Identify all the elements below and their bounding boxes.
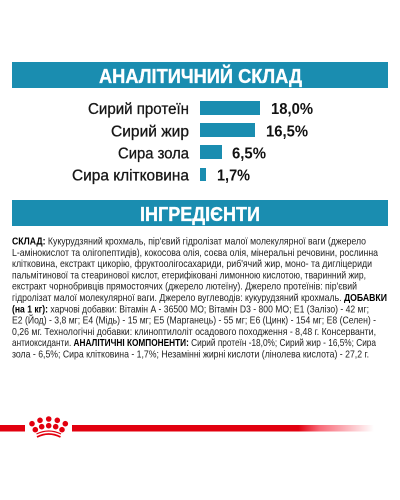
row: crude fat: 16,5% (266, 124, 308, 140)
row: crude ash: Сира зола (118, 146, 189, 162)
row: crude fibre: 1,7% (217, 168, 250, 184)
row: crude fat: Сирий жир (111, 124, 189, 140)
heading banner: ingredients: ІНГРЕДІЄНТИ (140, 203, 260, 226)
heading banner: ingredients (12, 200, 388, 226)
footer: red line with crown logo (0, 416, 374, 437)
row: crude fibre: Сира клітковина (72, 168, 189, 184)
row: crude fat (111, 123, 308, 140)
icon: royal crown (29, 416, 68, 437)
red line left (0, 425, 25, 432)
ingredients text block: гідролізат малої молекулярної ваги. Джерело вуглеводів: кукурудзяний крохмаль. ДОБАВКИ (12, 292, 387, 304)
bar chart (72, 101, 313, 184)
panel: ingredients (12, 200, 388, 360)
heading banner: analytical composition: АНАЛІТИЧНИЙ СКЛАД (99, 64, 302, 88)
row: crude ash (118, 145, 266, 162)
row: crude protein (88, 101, 313, 118)
ingredients text block (12, 236, 387, 360)
row: crude protein: 18,0% (271, 101, 313, 118)
heading banner: analytical composition (12, 62, 388, 88)
panel: analytical composition (12, 62, 388, 184)
row: crude protein: Сирий протеїн (88, 101, 189, 118)
row: crude fibre (72, 168, 250, 184)
row: crude ash: 6,5% (232, 146, 266, 162)
red line right with fade (72, 425, 374, 432)
